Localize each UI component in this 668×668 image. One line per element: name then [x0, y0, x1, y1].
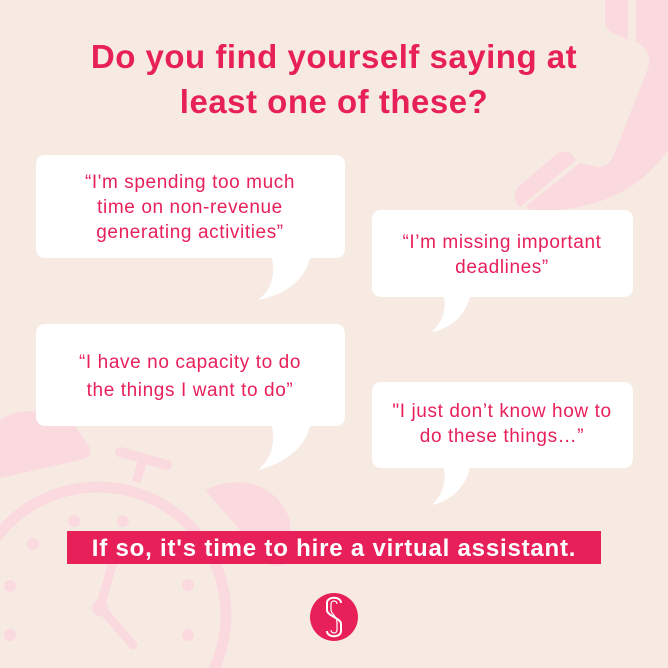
- bubble 3: [36, 324, 345, 470]
- decoration: alarm clock: [0, 452, 226, 668]
- banner: If so, it's time to hire a virtual assistant.: [92, 535, 576, 562]
- bubble 2: [372, 210, 633, 332]
- title: Do you find yourself saying at: [91, 38, 577, 75]
- bubble 1: “I'm spending too much: [85, 172, 295, 193]
- title: least one of these?: [180, 83, 488, 120]
- logo: [310, 593, 358, 641]
- bubble 4: do these things…”: [420, 426, 584, 447]
- bubble 1: generating activities”: [96, 222, 284, 243]
- bubble 4: "I just don’t know how to: [392, 401, 612, 422]
- bubble 4: [372, 382, 633, 505]
- bubble 2: deadlines”: [455, 257, 549, 278]
- decoration: telephone: [515, 0, 668, 212]
- bubble 3: “I have no capacity to do: [79, 352, 301, 373]
- bubble 2: “I’m missing important: [402, 232, 602, 253]
- bubble 1: time on non-revenue: [97, 197, 283, 218]
- bubble 3: the things I want to do”: [87, 380, 293, 401]
- bubble 1: [36, 155, 345, 300]
- title: [91, 38, 577, 120]
